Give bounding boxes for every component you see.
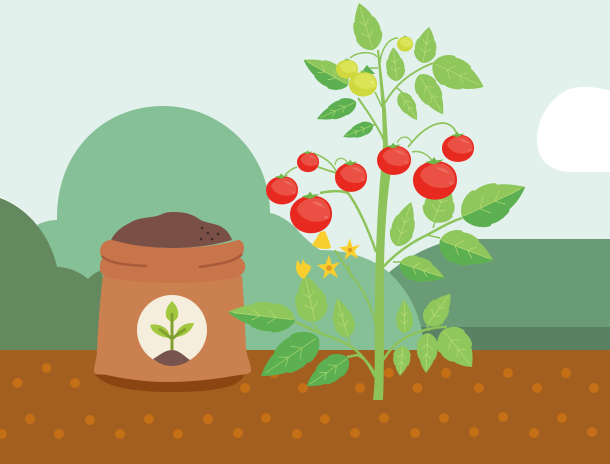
leaf 12 [454,169,534,235]
leaf 17 [251,323,327,390]
leaf 19 [290,272,331,325]
soil ground [0,350,610,464]
leaf 25 [391,345,412,377]
leaf 6 [393,89,424,124]
main stem [373,50,391,400]
leaf 14 [434,225,499,276]
branches [285,38,462,378]
tomato 1 [266,173,298,204]
flower bud 2 [296,259,311,279]
leaf 2 [412,25,440,65]
hill: left dark green [0,198,110,352]
hill: white edge [0,197,38,226]
tomato 2 [290,192,332,233]
collar crease right [199,254,242,267]
leaf 7 [297,49,354,96]
leaf 1 [346,0,386,54]
leaf 4 [426,49,490,102]
leaf 13 [386,199,422,250]
compost specks [200,227,219,240]
tomato plant [226,0,534,400]
hill: right back [385,239,610,350]
flower bud 1 [312,231,331,249]
leaf 16 [226,298,297,335]
tomato 5 [377,143,411,175]
bag badge [137,295,207,365]
bag shadow [94,372,244,392]
tomato 4 [335,160,367,192]
flower star 2 [317,255,340,279]
cloud [537,87,610,172]
tomato 3 [297,150,319,172]
leaf 9 [341,119,375,143]
badge sprout [150,301,194,350]
flower star 1 [339,238,360,260]
hill: light green bushes [30,106,424,352]
leaf 21 [396,300,414,333]
green tomato 3 [349,70,377,96]
bag collar [100,240,245,283]
leaf 23 [430,320,485,378]
green tomato 1 [397,35,413,52]
small leaf behind fruit [360,65,375,74]
bag body [94,276,251,382]
leaf 15 [396,251,448,290]
green tomato 2 [336,58,358,79]
tomato 7 [442,132,474,162]
compost soil [111,212,232,248]
badge soil mound [153,350,190,366]
tomato 6 [413,157,457,200]
soil dots [0,363,599,439]
collar crease left [102,256,147,266]
leaf 11 [418,179,463,228]
leaf 5 [409,69,453,120]
leaf 8 [313,94,359,127]
leaf 24 [415,332,438,373]
leaf 3 [384,46,407,82]
hill: right dark band [415,327,610,352]
compost bag [94,212,251,392]
leaf 22 [418,287,460,332]
leaf 20 [327,296,358,340]
leaf 18 [300,347,355,396]
